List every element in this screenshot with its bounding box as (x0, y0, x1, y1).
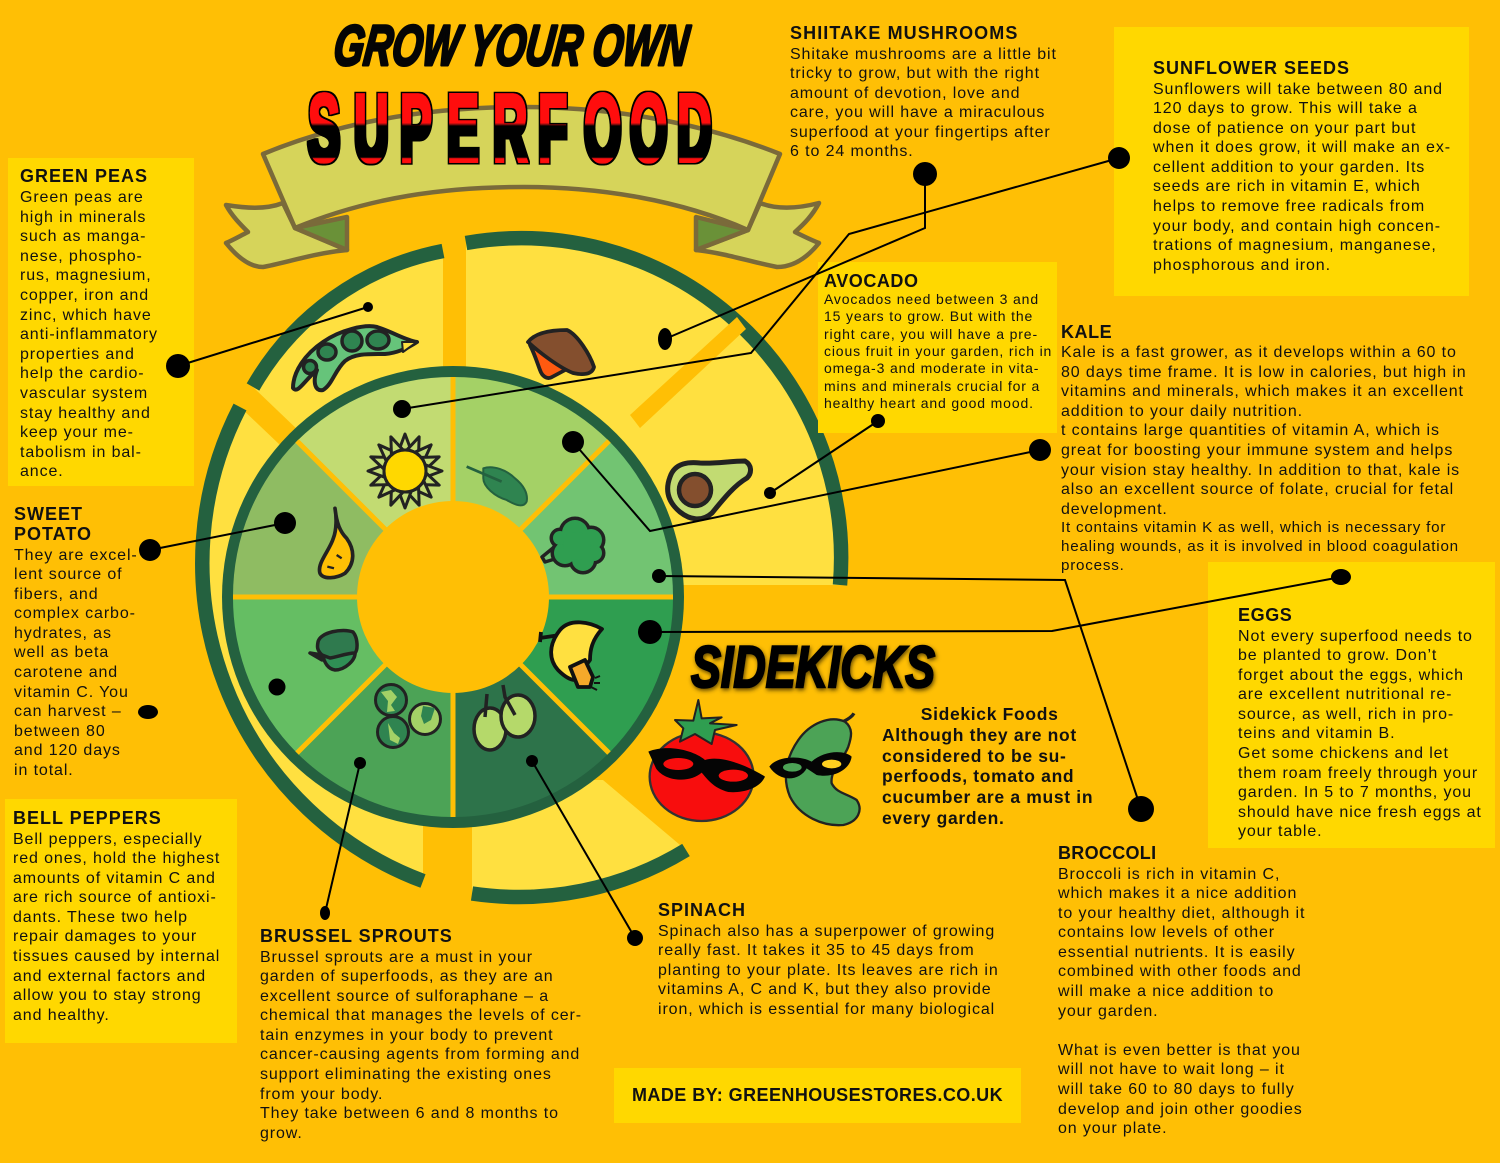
heading: grow your own: GROW YOUR OWN (330, 14, 693, 78)
panel: sweet potato: vitamin C. You (14, 684, 129, 701)
panel: eggs: your table. (1238, 823, 1323, 840)
panel: sweet potato: complex carbo- (14, 605, 136, 622)
icon: brussel sprouts (376, 684, 440, 748)
panel: sweet potato: and 120 days (14, 742, 121, 759)
panel: brussel sprouts: cancer-causing agents from forming and (260, 1046, 580, 1063)
dots: sunflower (393, 147, 1130, 418)
panel: bell peppers: and healthy. (13, 1007, 110, 1024)
panel: kale: It contains vitamin K as well, which is necessary for (1061, 519, 1446, 536)
panel: spinach: SPINACH (658, 900, 746, 920)
panel: green peas: stay healthy and (20, 405, 151, 422)
panel: avocado: Avocados need between 3 and (824, 291, 1039, 307)
panel: kale: healing wounds, as it is involved in blood coagulation (1061, 538, 1459, 555)
panel: spinach (658, 900, 999, 1018)
panel: green peas: tabolism in bal- (20, 444, 142, 461)
panel: brussel sprouts: They take between 6 and 8 months to (260, 1105, 559, 1122)
panel: eggs: forget about the eggs, which (1238, 667, 1464, 684)
panel: eggs (1208, 562, 1495, 848)
panel: sidekick foods: cucumber are a must in (882, 787, 1093, 807)
panel: green peas: nese, phospho- (20, 248, 143, 265)
panel: green peas: GREEN PEAS (20, 166, 148, 186)
panel: green peas: Green peas are (20, 189, 144, 206)
panel: sweet potato: well as beta (14, 644, 109, 661)
panel: kale: 80 days time frame. It is low in calories, but high in (1061, 364, 1467, 381)
panel: green peas: keep your me- (20, 424, 134, 441)
panel: spinach: Spinach also has a superpower of growing (658, 922, 995, 940)
panel: sunflower seeds: 120 days to grow. This will take a (1153, 100, 1418, 117)
icon: shiitake mushroom (528, 330, 594, 378)
heading: sidekicks: SIDEKICKS (691, 635, 935, 700)
panel: sweet potato: SWEET (14, 504, 83, 524)
panel: green peas: help the cardio- (20, 365, 145, 382)
panel: eggs: Get some chickens and let (1238, 745, 1449, 762)
panel: bell peppers: Bell peppers, especially (13, 830, 202, 848)
panel: green peas: copper, iron and (20, 287, 149, 304)
panel: sunflower seeds: trations of magnesium, manganese, (1153, 237, 1437, 254)
panel: sweet potato: carotene and (14, 664, 118, 681)
panel: avocado: right care, you will have a pre- (824, 326, 1038, 342)
panel: shiitake mushrooms: superfood at your fingertips after (790, 124, 1051, 141)
panel: broccoli: Broccoli is rich in vitamin C, (1058, 866, 1280, 882)
panel: sweet potato: They are excel- (14, 546, 138, 564)
dots: eggs (638, 569, 1351, 644)
panel: kale: KALE (1061, 322, 1112, 342)
panel: sunflower seeds: cellent addition to your garden. Its (1153, 159, 1425, 176)
panel: sidekick foods: Sidekick Foods (921, 704, 1058, 724)
panel: brussel sprouts: support eliminating the existing ones (260, 1066, 552, 1083)
panel: broccoli: your garden. (1058, 1003, 1159, 1020)
credit box: MADE BY: GREENHOUSESTORES.CO.UK (632, 1085, 1003, 1105)
panel: sweet potato: can harvest – (14, 703, 122, 720)
icon: masked tomato (648, 700, 765, 821)
panel: shiitake mushrooms (790, 23, 1057, 160)
panel: sidekick foods: every garden. (882, 808, 1005, 828)
panel: sidekick foods (882, 704, 1093, 828)
panel: broccoli: combined with other foods and (1058, 963, 1302, 980)
panel: avocado: AVOCADO (824, 271, 919, 291)
panel: shiitake mushrooms: 6 to 24 months. (790, 143, 914, 160)
panel: shiitake mushrooms: amount of devotion, love and (790, 85, 1020, 102)
panel: green peas: rus, magnesium, (20, 267, 152, 284)
panel: broccoli: will take 60 to 80 days to fully (1058, 1081, 1295, 1098)
panel: shiitake mushrooms: SHIITAKE MUSHROOMS (790, 23, 1018, 43)
panel: sunflower seeds: when it does grow, it will make an ex- (1153, 139, 1451, 156)
panel: brussel sprouts (260, 926, 582, 1142)
panel: green peas: ance. (20, 463, 64, 480)
panel: shiitake mushrooms: tricky to grow, but with the right (790, 65, 1040, 82)
panel: avocado (818, 262, 1057, 433)
dots: kale (562, 431, 1051, 461)
panel: kale: addition to your daily nutrition. (1061, 403, 1303, 420)
panel: sweet potato (14, 504, 138, 779)
panel: bell peppers: dants. These two help (13, 909, 188, 926)
panel: bell peppers: and external factors and (13, 968, 206, 985)
panel: brussel sprouts: excellent source of sulforaphane – a (260, 988, 549, 1005)
panel: bell peppers: red ones, hold the highest (13, 850, 220, 867)
panel: broccoli (1058, 843, 1305, 1137)
panel: broccoli: essential nutrients. It is easily (1058, 944, 1295, 961)
panel: green peas: anti-inflammatory (20, 326, 158, 343)
dots: sweet potato (139, 512, 296, 561)
panel: brussel sprouts: grow. (260, 1125, 303, 1142)
dots: avocado (764, 414, 885, 499)
panel: eggs: Not every superfood needs to (1238, 628, 1473, 644)
icon: masked cucumber (769, 713, 860, 825)
panel: avocado: 15 years to grow. But with the (824, 308, 1033, 324)
icon: spinach cabbage pair (474, 685, 535, 750)
outer yellow wheel with green rim (202, 238, 841, 897)
panel: shiitake mushrooms: care, you will have a miraculous (790, 104, 1045, 121)
panel: sweet potato: POTATO (14, 524, 92, 544)
panel: sunflower seeds: seeds are rich in vitamin E, which (1153, 178, 1421, 195)
panel: kale: Kale is a fast grower, as it develops within a 60 to (1061, 344, 1457, 361)
dots: spinach (526, 755, 643, 946)
panel: eggs: source, as well, rich in pro- (1238, 706, 1454, 723)
panel: bell peppers: amounts of vitamin C and (13, 870, 216, 887)
panel: brussel sprouts: BRUSSEL SPROUTS (260, 926, 453, 946)
panel: brussel sprouts: garden of superfoods, as they are an (260, 968, 554, 985)
panel: kale: development. (1061, 501, 1168, 518)
panel: broccoli: to your healthy diet, although it (1058, 905, 1305, 922)
panel: avocado: cious fruit in your garden, rich in (824, 343, 1052, 359)
panel: green peas (8, 158, 194, 486)
panel: kale: vitamins and minerals, which makes it an excellent (1061, 383, 1464, 400)
panel: bell peppers: BELL PEPPERS (13, 808, 162, 828)
panel: shiitake mushrooms: Shitake mushrooms are a little bit (790, 46, 1057, 62)
dots: broccoli (652, 569, 1154, 822)
panel: avocado: omega-3 and moderate in vita- (824, 360, 1039, 376)
panel: eggs: should have nice fresh eggs at (1238, 804, 1482, 821)
icon: sweet potato (319, 508, 353, 578)
icon: broccoli (542, 520, 602, 571)
icon: pea pod (293, 326, 417, 390)
panel: sunflower seeds: helps to remove free radicals from (1153, 198, 1425, 215)
panel: sunflower seeds: SUNFLOWER SEEDS (1153, 58, 1350, 78)
panel: broccoli: develop and join other goodies (1058, 1101, 1303, 1118)
panel: sidekick foods: perfoods, tomato and (882, 766, 1074, 786)
inner wheel of eight superfood wedges (222, 366, 684, 828)
panel: kale: also an excellent source of folate, crucial for fetal (1061, 481, 1454, 498)
panel: bell peppers: tissues caused by internal (13, 948, 220, 965)
panel: brussel sprouts: Brussel sprouts are a must in your (260, 948, 533, 966)
panel: bell peppers: allow you to stay strong (13, 987, 202, 1004)
panel: eggs: them roam freely through your (1238, 765, 1478, 782)
panel: broccoli: which makes it a nice addition (1058, 885, 1297, 902)
panel: spinach: planting to your plate. Its leaves are rich in (658, 962, 999, 979)
panel: sidekick foods: considered to be su- (882, 746, 1067, 766)
panel: sweet potato: between 80 (14, 723, 106, 740)
panel: sunflower seeds (1114, 27, 1469, 296)
dots: brussel sprouts (320, 757, 366, 920)
panel: brussel sprouts: from your body. (260, 1086, 383, 1103)
panel: eggs: be planted to grow. Don’t (1238, 647, 1437, 664)
panel: sweet potato: fibers, and (14, 586, 99, 603)
panel: kale: your vision stay healthy. In addition to that, kale is (1061, 462, 1460, 479)
panel: eggs: teins and vitamin B. (1238, 725, 1395, 742)
panel: kale (1061, 322, 1467, 574)
panel: broccoli: What is even better is that you (1058, 1042, 1301, 1059)
panel: eggs: are excellent nutritional re- (1238, 686, 1452, 703)
panel: avocado: mins and minerals crucial for a (824, 378, 1040, 394)
panel: kale: great for boosting your immune system and helps (1061, 442, 1453, 459)
panel: green peas: such as manga- (20, 228, 146, 245)
credit box (614, 1068, 1021, 1123)
panel: avocado: healthy heart and good mood. (824, 395, 1034, 411)
panel: green peas: properties and (20, 346, 135, 363)
panel: sunflower seeds: dose of patience on your part but (1153, 120, 1416, 137)
panel: eggs: garden. In 5 to 7 months, you (1238, 784, 1472, 801)
panel: green peas: vascular system (20, 385, 148, 402)
panel: green peas: zinc, which have (20, 307, 152, 324)
dots: shiitake (658, 162, 937, 350)
heading: superfood: SUPERFOOD (308, 75, 712, 183)
dots: bell pepper (138, 678, 286, 719)
panel: bell peppers: repair damages to your (13, 928, 197, 945)
panel: bell peppers (5, 799, 237, 1043)
panel: kale: process. (1061, 557, 1125, 574)
panel: sunflower seeds: Sunflowers will take between 80 and (1153, 80, 1443, 98)
panel: broccoli: contains low levels of other (1058, 924, 1275, 941)
panel: broccoli: on your plate. (1058, 1120, 1167, 1137)
panel: sweet potato: lent source of (14, 566, 123, 583)
icon: avocado (668, 461, 751, 519)
panel: sunflower seeds: your body, and contain high concen- (1153, 218, 1441, 235)
panel: brussel sprouts: tain enzymes in your body to prevent (260, 1027, 554, 1044)
panel: sweet potato: hydrates, as (14, 625, 112, 642)
panel: broccoli: will not have to wait long – it (1058, 1061, 1285, 1078)
panel: sunflower seeds: phosphorous and iron. (1153, 257, 1331, 274)
panel: spinach: really fast. It takes it 35 to 45 days from (658, 942, 975, 959)
panel: brussel sprouts: chemical that manages the levels of cer- (260, 1007, 582, 1024)
icon: chicken (540, 622, 602, 690)
banner (226, 107, 819, 267)
panel: bell peppers: are rich source of antioxi- (13, 889, 217, 906)
panel: green peas: high in minerals (20, 209, 146, 226)
icon: sunflower (368, 434, 442, 508)
icon: spinach leaf (467, 467, 527, 505)
icon: bell pepper (310, 630, 357, 670)
panel: sweet potato: in total. (14, 762, 74, 779)
dots: green peas (166, 302, 373, 378)
panel: kale: t contains large quantities of vitamin A, which is (1061, 422, 1440, 439)
panel: eggs: EGGS (1238, 605, 1292, 625)
panel: sidekick foods: Although they are not (882, 725, 1077, 745)
panel: broccoli: BROCCOLI (1058, 843, 1156, 863)
panel: broccoli: will make a nice addition to (1058, 983, 1274, 1000)
panel: spinach: vitamins A, C and K, but they also provide (658, 981, 992, 998)
panel: spinach: iron, which is essential for many biological (658, 1001, 995, 1018)
